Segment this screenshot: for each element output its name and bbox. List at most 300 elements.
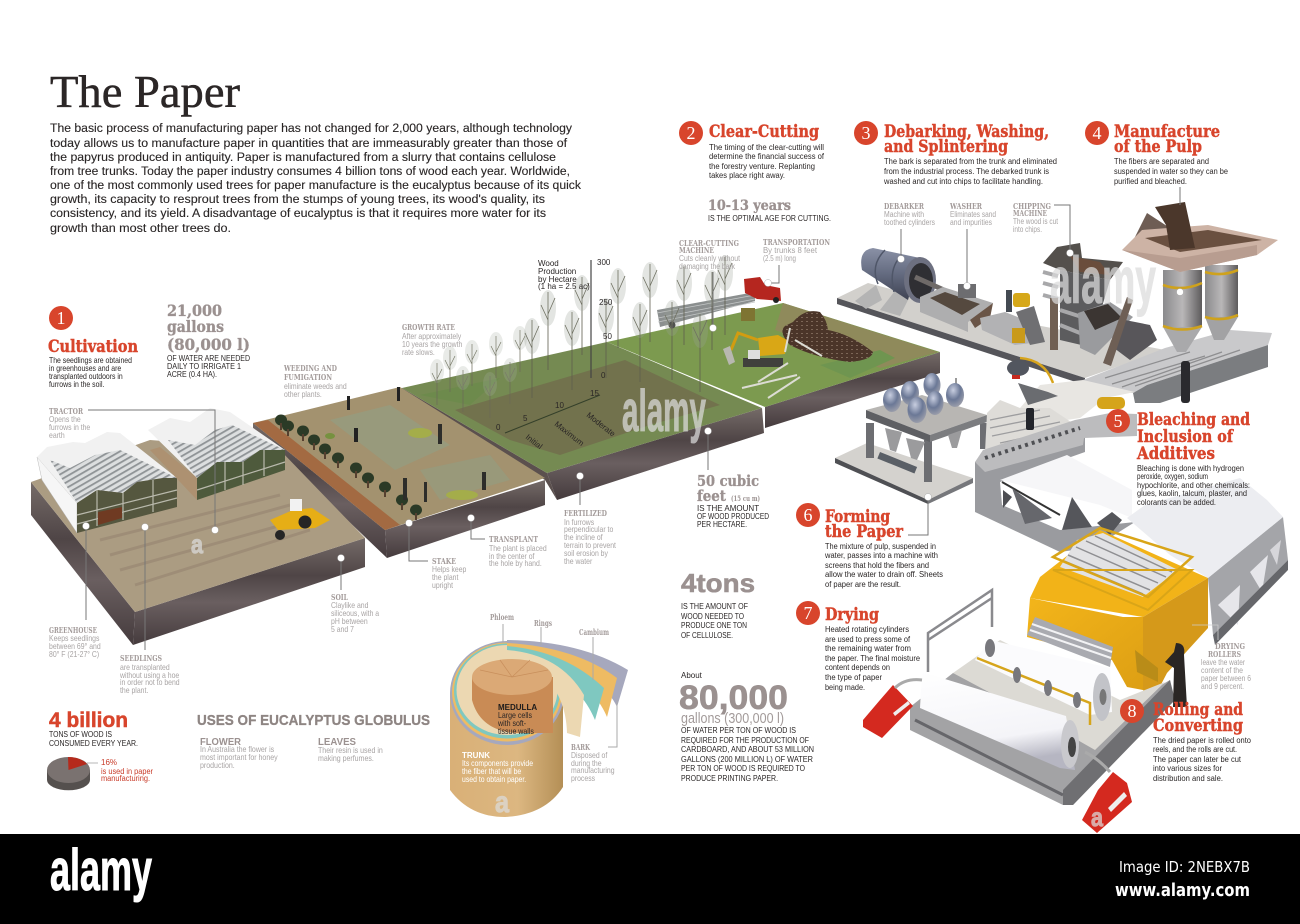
number badge 4	[1085, 121, 1109, 145]
stat: 21,000 gallons	[167, 301, 250, 379]
description: The fibers are separated and	[1114, 157, 1209, 166]
stat: 50 cubic feet: (15 cu m)	[731, 494, 760, 503]
icon: pulp hopper	[1122, 202, 1278, 272]
label: drying rollers: DRYING	[1215, 641, 1245, 651]
label: seedlings: SEEDLINGS	[120, 653, 162, 663]
label: drying rollers	[1192, 625, 1251, 691]
label: seedlings	[119, 653, 180, 695]
label: fertilized: terrain to prevent	[564, 540, 617, 550]
label: soil: SOIL	[331, 592, 348, 602]
number badge 2: 2	[686, 123, 696, 143]
description: water, passes into a machine with	[824, 551, 938, 560]
label: transplant	[489, 534, 547, 568]
label: drying rollers: paper between 6	[1201, 674, 1251, 683]
stat: 80,000 gallons: REQUIRED FOR THE PRODUCTION OF	[681, 736, 809, 745]
plants and workers	[275, 387, 486, 520]
label: fertilized: FERTILIZED	[564, 508, 607, 518]
title: The Paper	[50, 66, 240, 117]
label: seedlings: are transplanted	[120, 662, 170, 672]
label: greenhouse: 80° F (21-27° C)	[49, 649, 100, 659]
stat: 80,000 gallons: PRODUCE PRINTING PAPER.	[681, 774, 778, 783]
pie annotation	[101, 758, 153, 783]
number badge 6	[796, 503, 820, 527]
chart: wood production axes: Maximum	[553, 419, 586, 448]
chart: wood production axes: 300	[597, 258, 611, 267]
label: growth rate: After approximately	[402, 331, 461, 341]
label: chipping machine: into chips.	[1013, 225, 1042, 234]
heading: Inclusion of	[1137, 427, 1234, 446]
label: soil: 5 and 7	[331, 624, 354, 634]
icon: wood chip pile	[782, 311, 873, 362]
watermark: a	[191, 529, 203, 559]
leaves: LEAVES	[318, 737, 356, 748]
chart: wood production axes	[496, 258, 617, 451]
flower: In Australia the flower is	[200, 745, 274, 754]
label: tractor: earth	[49, 430, 65, 440]
stat: 80,000 gallons: About	[681, 671, 703, 680]
description: The paper can later be cut	[1153, 755, 1242, 764]
heading: Clear-Cutting	[709, 122, 819, 141]
icon: worker	[1181, 361, 1190, 403]
icon: yellow tractor	[270, 499, 330, 540]
number badge 2	[679, 121, 703, 145]
heading	[884, 122, 1049, 156]
label: seedlings: without using a hoe	[119, 670, 179, 680]
label: bark	[571, 742, 615, 783]
label: bark: manufacturing	[571, 765, 615, 775]
heading: Forming	[825, 507, 890, 526]
label: soil: siliceous, with a	[331, 608, 380, 618]
number badge 5	[1106, 409, 1130, 433]
label: weeding and fumigation: eliminate weeds and	[284, 381, 347, 391]
flower: production.	[200, 761, 235, 770]
callout lines and dots: cultivation	[82, 410, 344, 650]
heading: USES OF EUCALYPTUS GLOBULUS	[197, 712, 430, 729]
description: transplanted outdoors in	[49, 371, 123, 381]
stat: 80,000 gallons: OF WATER PER TON OF WOOD IS	[681, 726, 796, 735]
chart title: wood production by hectare: Production	[538, 267, 576, 276]
description: peroxide, oxygen, sodium	[1137, 472, 1208, 481]
medulla text	[497, 703, 537, 736]
label: weeding and fumigation: WEEDING AND	[283, 363, 337, 373]
icon: greenhouse left	[37, 432, 177, 533]
label: washer: and impurities	[950, 218, 992, 227]
icon: paper roll upper	[975, 640, 1112, 721]
stat: 80,000 gallons: PER TON OF WOOD IS REQUIRED TO	[681, 764, 805, 773]
step 6: forming the paper	[796, 494, 943, 589]
description: takes place right away.	[709, 171, 785, 180]
intermediate machines	[980, 290, 1045, 345]
stat: 4 billion: 4 billion	[49, 709, 128, 732]
watermark: a	[1091, 802, 1103, 832]
stat: 50 cubic feet: IS THE AMOUNT	[697, 504, 759, 513]
concentric rim	[450, 641, 564, 745]
intro text block: from tree trunks. Today the paper industry consumes 4 billion tons of wood each year. Worldwide,	[50, 164, 570, 178]
stat: 80,000 gallons: 80,000	[679, 679, 788, 717]
gate frame	[928, 590, 992, 672]
intro text block	[50, 121, 582, 235]
medulla text: tissue walls	[498, 727, 534, 736]
chart title: wood production by hectare: Wood	[538, 259, 559, 268]
pie annotation: is used in paper	[101, 767, 153, 776]
label: chipping machine: The wood is cut	[1013, 217, 1059, 226]
stat: 4 tons: 4tons	[681, 568, 755, 598]
chart: wood production axes: 250	[599, 298, 613, 307]
stat: 50 cubic feet: OF WOOD PRODUCED	[697, 512, 769, 521]
description	[824, 542, 943, 589]
machinery: white hood and drying section	[1027, 478, 1288, 700]
heading: Drying	[825, 605, 879, 624]
pie annotation: 16%	[101, 758, 117, 767]
label: washer	[949, 201, 996, 290]
number badge 1: 1	[56, 308, 66, 328]
stat: 10-13 years: IS THE OPTIMAL AGE FOR CUTTING.	[708, 214, 831, 223]
intro text block: today allows us to manufacture paper in quantities that are immeasurably greater than those of	[50, 136, 568, 150]
label: greenhouse: Keeps seedlings	[49, 633, 100, 643]
chart: 16% pie	[47, 757, 98, 790]
number badge 8: 8	[1128, 701, 1136, 721]
trees	[430, 255, 733, 418]
label: bark: BARK	[571, 742, 591, 752]
alamy logo: alamy	[50, 838, 152, 903]
flower: most important for honey	[200, 753, 278, 762]
description: distribution and sale.	[1153, 774, 1223, 783]
description: in greenhouses and are	[49, 363, 121, 373]
description: The mixture of pulp, suspended in	[825, 542, 936, 551]
description	[1137, 464, 1250, 507]
description	[825, 625, 921, 692]
trunk body	[450, 693, 563, 817]
label: tractor: Opens the	[49, 414, 81, 424]
label: soil: pH between	[331, 616, 368, 626]
label: fertilized	[564, 508, 617, 566]
description	[709, 143, 825, 180]
folded sheets	[1213, 540, 1288, 645]
label: transplant: The plant is placed	[489, 543, 547, 553]
rollers under frame	[1060, 533, 1178, 597]
description: The dried paper is rolled onto	[1153, 736, 1252, 745]
heading: Additives	[1136, 444, 1215, 463]
label: bark: during the	[571, 758, 602, 768]
heading: Bleaching and	[1137, 410, 1250, 429]
stair deck	[985, 400, 1080, 452]
description: the remaining water from	[825, 644, 911, 653]
step 8: rolling and converting	[1120, 699, 1252, 783]
label: tractor: furrows in the	[49, 422, 90, 432]
icon: greenhouse right	[148, 408, 285, 500]
website: www.alamy.com	[1115, 880, 1250, 901]
label: stake	[432, 556, 466, 590]
stat: 21,000 gallons: gallons	[167, 317, 224, 336]
description: of paper are the result.	[825, 580, 901, 589]
label: transportation: (2.5 m) long	[763, 254, 796, 263]
label: growth rate: GROWTH RATE	[402, 322, 455, 332]
label: debarker: Machine with	[884, 210, 924, 219]
landscape block 1: cultivation field	[31, 408, 365, 645]
label: fertilized: the incline of	[564, 532, 603, 542]
description	[49, 355, 132, 389]
stat: 4 billion: TONS OF WOOD IS	[49, 730, 112, 739]
label: chipping machine: CHIPPING	[1013, 201, 1051, 211]
label: seedlings: the plant.	[120, 685, 148, 695]
trunk text: used to obtain paper.	[462, 774, 526, 784]
icon: red control box right	[1082, 752, 1132, 833]
label: tractor: TRACTOR	[49, 406, 83, 416]
stat: 80,000 gallons: GALLONS (200 MILLION L) OF WATER	[681, 755, 813, 764]
label: washer: Eliminates sand	[950, 210, 996, 219]
trunk text: TRUNK	[462, 751, 490, 760]
watermark	[191, 243, 1156, 832]
stat: 50 cubic feet: 50 cubic	[697, 472, 759, 490]
yellow rod and discs	[977, 639, 1090, 725]
intro text block: consistency, and its yield. A disadvantage of eucalyptus is that it requires more water for its	[50, 206, 546, 220]
heading: and Splintering	[884, 137, 1008, 156]
description: content depends on	[825, 663, 890, 672]
description: from the industrial process. The debarked trunk is	[884, 167, 1049, 176]
chart: wood production axes: Moderate	[585, 410, 617, 439]
description: furrows in the soil.	[49, 379, 104, 389]
chart: wood production axes: 50	[603, 332, 612, 341]
label: bark: process	[571, 773, 595, 783]
description: colorants can be added.	[1137, 498, 1216, 507]
number badge 7: 7	[804, 603, 812, 623]
heading: of the Pulp	[1114, 137, 1202, 156]
label: transportation: TRANSPORTATION	[763, 237, 830, 247]
label: soil: Claylike and	[331, 600, 368, 610]
description: The timing of the clear-cutting will	[709, 143, 824, 152]
description: screens that hold the fibers and	[825, 561, 929, 570]
heading	[1153, 700, 1243, 735]
stat: 4 tons: IS THE AMOUNT OF	[681, 602, 748, 611]
label: growth rate: rate slows.	[402, 347, 435, 357]
description: hypochlorite, and other chemicals:	[1137, 481, 1250, 490]
description: Bleaching is done with hydrogen	[1137, 464, 1244, 473]
intro text block: growth, its capacity to resprout trees from the stumps of young trees, its wood's quality, its	[50, 192, 545, 206]
description: suspended in water so they can be	[1114, 167, 1229, 176]
label: clear-cutting machine: MACHINE	[679, 245, 714, 255]
description: are used to press some of	[825, 635, 911, 644]
machinery: reel frame	[863, 590, 1187, 833]
label: greenhouse: GREENHOUSE	[49, 625, 97, 635]
label: clear-cutting machine: damaging the bark	[679, 262, 736, 271]
icon: yellow excavator	[723, 333, 787, 367]
step 7: drying	[796, 601, 921, 692]
heading: Converting	[1153, 716, 1243, 735]
chart: wood production axes: 5	[523, 414, 528, 423]
image id: Image ID: 2NEBX7B	[1119, 858, 1250, 876]
description: glues, kaolin, talcum, plaster, and	[1137, 489, 1247, 498]
stat: 4 billion	[47, 709, 153, 790]
step 4: manufacture of the pulp	[1085, 121, 1229, 296]
label: clear-cutting machine: CLEAR-CUTTING	[679, 238, 739, 248]
landscape block 3: forest growth	[400, 255, 764, 500]
number badge 6: 6	[804, 505, 812, 525]
description	[1153, 736, 1252, 783]
icon: chipping machine	[1043, 243, 1157, 366]
stat: 10-13 years: 10-13 years	[708, 198, 791, 214]
stat: 50 cubic feet: PER HECTARE.	[697, 520, 747, 529]
label: stake: Helps keep	[432, 564, 466, 574]
number badge 3	[854, 121, 878, 145]
description: into various sizes for	[1153, 764, 1222, 773]
label: rings: Rings	[534, 618, 552, 628]
chart: wood production axes: 0	[601, 371, 606, 380]
step 1: cultivation	[48, 306, 138, 389]
watermark: a	[495, 786, 509, 819]
icon: pulp cylinder front	[1163, 265, 1238, 352]
step 2: clear-cutting	[679, 121, 825, 180]
medulla core	[472, 677, 553, 733]
label: chipping machine	[1013, 201, 1074, 256]
stat: 80,000 gallons	[679, 671, 814, 783]
pie annotation: manufacturing.	[101, 774, 150, 783]
medulla text: MEDULLA	[498, 703, 537, 712]
label: clear-cutting machine: Cuts cleanly without	[679, 254, 741, 263]
label: debarker: DEBARKER	[884, 201, 924, 211]
diagram: trunk cross section	[450, 612, 628, 817]
callout lines and dots: field and forest	[406, 428, 712, 561]
watermark: alamy	[1050, 243, 1156, 317]
label: transportation	[763, 237, 830, 286]
heading: cultivation: Cultivation	[48, 337, 138, 356]
label: bark: Disposed of	[571, 750, 608, 760]
label: transportation: By trunks 8 feet	[763, 246, 818, 255]
description: allow the water to drain off. Sheets	[825, 570, 943, 579]
leaves	[318, 737, 383, 763]
spiral layers	[507, 640, 628, 737]
label: growth rate	[402, 322, 462, 357]
landscape block 4: clear-cutting terrain	[607, 277, 940, 428]
intro text block: The basic process of manufacturing paper has not changed for 2,000 years, although technology	[50, 121, 573, 135]
stat: 4 tons: WOOD NEEDED TO	[681, 612, 744, 621]
trunk leader lines	[503, 624, 617, 747]
leaves: Their resin is used in	[318, 746, 383, 755]
label: transplant: TRANSPLANT	[489, 534, 538, 544]
trunk text: Its components provide	[462, 758, 533, 768]
landscape block 2: weeding field	[253, 387, 545, 558]
chart title: wood production by hectare	[538, 259, 590, 291]
stat: 50 cubic feet	[697, 472, 769, 529]
icon: worker	[1026, 408, 1034, 430]
description: Heated rotating cylinders	[825, 625, 909, 634]
label: debarker	[884, 201, 935, 262]
stat: 80,000 gallons: gallons (300,000 l)	[681, 711, 784, 727]
label: weeding and fumigation	[283, 363, 347, 399]
description: determine the financial success of	[709, 152, 825, 161]
description	[1114, 157, 1229, 186]
label: fertilized: soil erosion by	[564, 548, 608, 558]
machinery: long press section	[975, 413, 1137, 552]
icon: small loader	[741, 308, 755, 321]
description: The seedlings are obtained	[49, 355, 132, 365]
label: transplant: in the center of	[489, 551, 535, 561]
label: clear-cutting machine	[679, 238, 741, 332]
stat: 4 tons: OF CELLULOSE.	[681, 631, 733, 640]
watermark: alamy	[622, 379, 706, 444]
stat: 21,000 gallons: 21,000	[167, 301, 222, 320]
heading	[1136, 410, 1250, 463]
icon: truck and trailer	[657, 277, 781, 328]
stat: 21,000 gallons: (80,000 l)	[167, 335, 250, 354]
label: debarker: toothed cylinders	[884, 218, 935, 227]
intro text block: one of the most commonly used trees for paper manufacture is the eucalyptus because of its quick	[50, 178, 582, 192]
heading: the Paper	[825, 522, 903, 541]
label: drying rollers: leave the water	[1201, 658, 1245, 667]
description: the type of paper	[825, 673, 882, 682]
label: fertilized: the water	[564, 556, 593, 566]
stat: 80,000 gallons: CARDBOARD, AND ABOUT 53 MILLION	[681, 745, 814, 754]
leaves: making perfumes.	[318, 754, 374, 763]
stat: 4 tons: PRODUCE ONE TON	[681, 621, 747, 630]
label: fertilized: In furrows	[564, 517, 594, 527]
label: cambium: Cambium	[579, 627, 609, 637]
intro text block: the papyrus produced in antiquity. Paper is manufactured from a slurry that contains cellulose	[50, 150, 556, 164]
flower	[200, 737, 278, 770]
step 5: bleaching	[1106, 409, 1250, 507]
panel: uses of eucalyptus	[197, 712, 430, 770]
icon: paper roll lower	[920, 672, 1079, 770]
description: the paper. The final moisture	[825, 654, 921, 663]
label: phloem: Phloem	[490, 612, 514, 622]
icon: yellow dryer	[1027, 528, 1208, 700]
trunk text	[462, 751, 533, 784]
description: being made.	[825, 683, 865, 692]
hoppers	[885, 428, 962, 460]
label: seedlings: in order not to bend	[120, 677, 180, 687]
label: stake: upright	[432, 580, 454, 590]
chart: wood production axes: Initial	[524, 432, 544, 451]
chart: wood production axes: 10	[555, 401, 564, 410]
stat: 4 tons	[681, 568, 755, 640]
machinery: debarking and chipping line	[837, 202, 1278, 403]
stat: 4 billion: CONSUMED EVERY YEAR.	[49, 739, 138, 748]
medulla text: Large cells	[498, 711, 532, 720]
description: washed and cut into chips to facilitate handling.	[883, 177, 1043, 186]
label: soil	[331, 592, 380, 634]
worker	[1165, 643, 1187, 707]
machinery: mid plant junction	[1007, 358, 1135, 424]
chart title: wood production by hectare: (1 ha = 2.5 ac)	[538, 282, 590, 291]
heading	[825, 507, 903, 541]
icon: washer tank	[920, 284, 993, 332]
description: The bark is separated from the trunk and eliminated	[884, 157, 1057, 166]
stat: 50 cubic feet: feet	[697, 487, 726, 505]
label: chipping machine: MACHINE	[1013, 208, 1047, 218]
icon: debarker drum	[855, 248, 955, 316]
medulla text: with soft-	[497, 719, 527, 728]
heading: Debarking, Washing,	[884, 122, 1049, 141]
label: tractor	[49, 406, 90, 440]
trunk text: the fiber that will be	[462, 766, 521, 776]
label: stake: the plant	[432, 572, 459, 582]
intro text block: growth than most other trees do.	[50, 221, 231, 235]
footer bar	[0, 834, 1300, 924]
number badge 3: 3	[862, 123, 870, 143]
stat: 21,000 gallons: OF WATER ARE NEEDED	[167, 354, 250, 363]
conveyor bed and wall	[1083, 330, 1272, 403]
flower: FLOWER	[200, 737, 242, 748]
chart title: wood production by hectare: by Hectare	[538, 275, 577, 284]
label: drying rollers: content of the	[1201, 666, 1243, 675]
description: reels, and the rolls are cut.	[1153, 745, 1237, 754]
chart: wood production axes: 15	[590, 389, 599, 398]
table legs	[866, 395, 988, 482]
stat: 21,000 gallons: DAILY TO IRRIGATE 1	[167, 362, 241, 371]
stat: 10-13 years	[708, 198, 831, 223]
step 3: debarking, washing, splintering	[854, 121, 1057, 186]
label: transplant: the hole by hand.	[489, 558, 542, 568]
description	[883, 157, 1057, 186]
